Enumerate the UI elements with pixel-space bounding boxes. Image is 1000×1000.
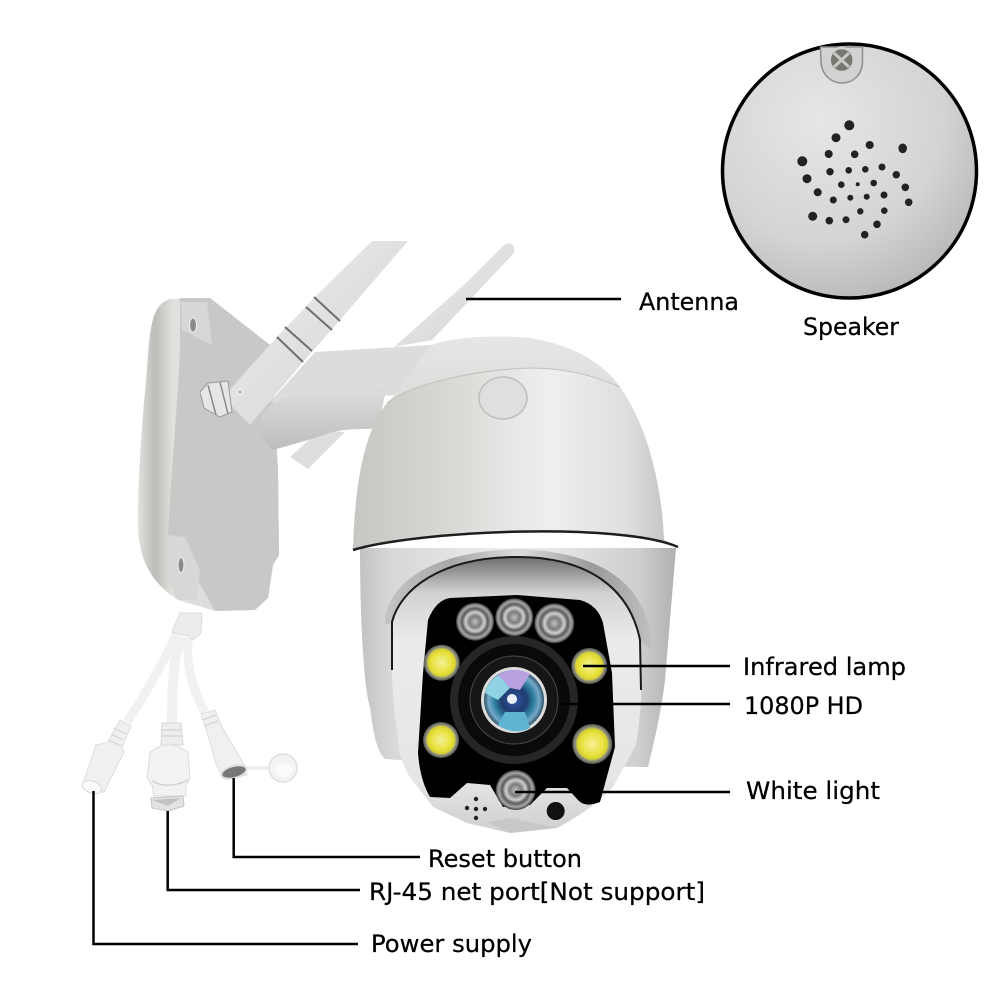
dome: [353, 336, 678, 550]
plate rim: [138, 298, 279, 611]
ball arch shadow: [392, 557, 641, 690]
label: Infrared lamp: Infrared lamp: [743, 653, 906, 681]
back antenna: [394, 243, 514, 347]
label: RJ-45 net port: RJ-45 net port[Not support]: [369, 878, 705, 906]
cable: middle branch: [172, 636, 181, 724]
bottom screw hole: [167, 535, 200, 600]
IR sensor: [547, 802, 565, 820]
label: White light: White light: [746, 777, 880, 805]
cables and connectors: [81, 613, 297, 811]
plate face: [168, 298, 279, 611]
dome top cap: [387, 336, 620, 403]
bottom speaker holes: [465, 797, 487, 820]
dome button: [479, 377, 527, 419]
dome seam: [387, 368, 620, 403]
hood: [385, 549, 652, 650]
cable: left branch: [127, 632, 177, 722]
lens glass: [484, 670, 544, 730]
screw tab: [820, 47, 862, 83]
connector: RJ-45: [147, 723, 190, 811]
splitter: [172, 613, 202, 640]
label: Speaker: Speaker: [803, 313, 899, 341]
bottom chevron seam: [487, 818, 557, 833]
label: Power supply: Power supply: [371, 930, 532, 958]
yellow LEDs: [423, 645, 612, 764]
mount arm: [260, 345, 470, 450]
panel: speaker inset: [722, 44, 976, 298]
lower arm: [260, 385, 387, 450]
antenna rings: [277, 297, 340, 362]
speaker holes: [797, 120, 912, 238]
label: Reset button: Reset button: [428, 845, 582, 873]
dome rim line: [353, 531, 678, 550]
top screw hole: [181, 302, 212, 345]
upper arm: [270, 345, 470, 402]
leader lines: [94, 299, 730, 944]
speaker disc: [722, 44, 976, 298]
wall mount plate: [138, 298, 279, 611]
black face: [418, 595, 615, 807]
connector: power supply: [81, 720, 131, 796]
connector cap: [246, 754, 297, 782]
white LEDs: [456, 598, 574, 810]
dome body: [353, 368, 678, 550]
camera ball: [391, 557, 642, 833]
antenna joint: [200, 381, 242, 417]
label: 1080P HD: 1080P HD: [744, 692, 863, 720]
lens: [450, 636, 578, 764]
label: Antenna: Antenna: [639, 288, 739, 316]
camera housing: [360, 548, 676, 767]
cable: right branch: [188, 638, 205, 712]
lower antenna stub: [290, 430, 345, 469]
connector: reset button: [201, 710, 248, 781]
front antenna: [200, 241, 408, 425]
